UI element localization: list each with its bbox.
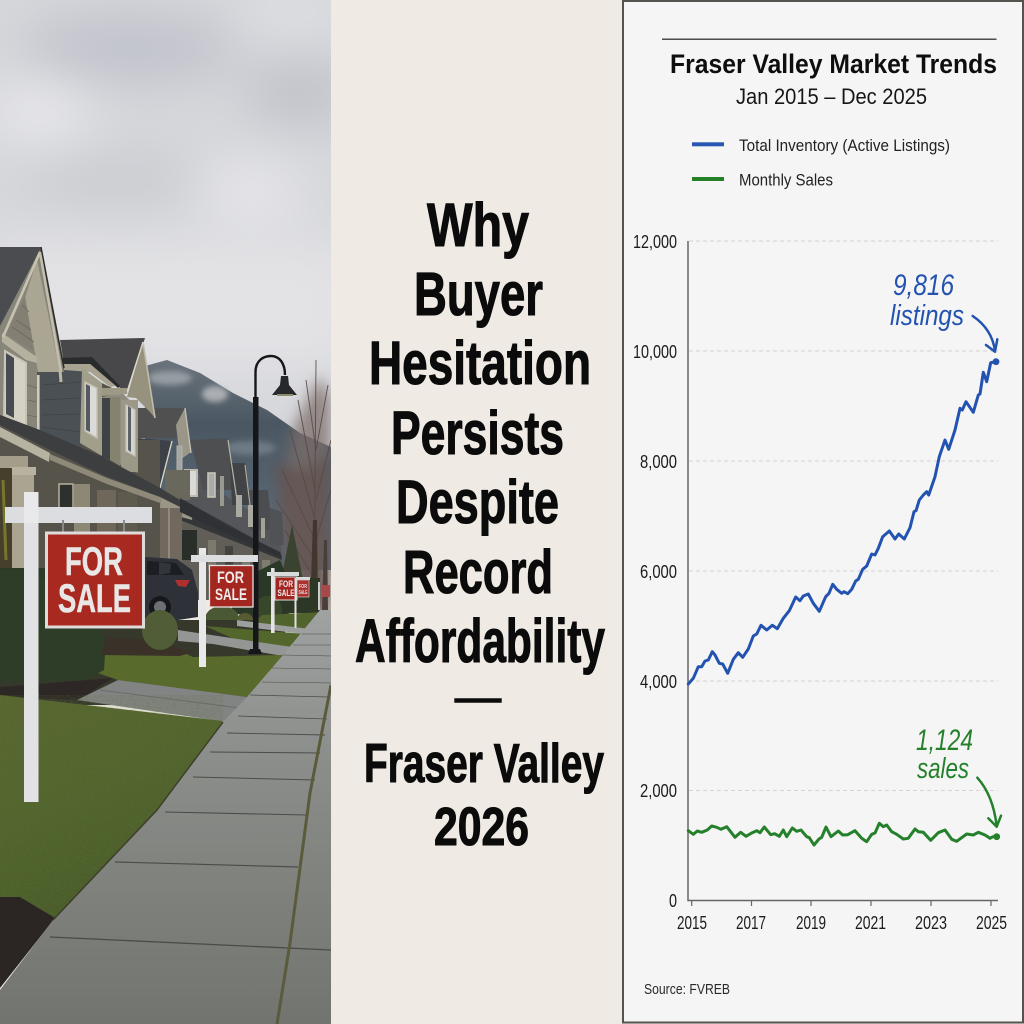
- photo: overcast sky: [0, 0, 331, 447]
- callout: sales: [916, 724, 1001, 827]
- callout: listings: listings: [890, 300, 964, 332]
- title: main headline: 2026: [434, 798, 529, 857]
- title: main headline: Why: [427, 191, 529, 260]
- x axis labels: 2017: [736, 913, 766, 933]
- title: dash separator: —: [455, 670, 501, 722]
- series: total inventory line: [688, 358, 999, 684]
- callout: listings: [890, 269, 997, 352]
- third house: [138, 408, 192, 562]
- sign: third and fourth distant for sale signs: SALE: [278, 588, 294, 598]
- photo: foreground shrubs: [0, 610, 186, 682]
- sign: second for sale sign: [191, 548, 258, 667]
- chart gridlines and axes: [688, 241, 998, 906]
- y axis labels: 4,000: [640, 672, 677, 692]
- sign: second for sale sign: SALE: [215, 585, 247, 604]
- y axis labels: 0: [669, 891, 677, 911]
- y axis labels: 8,000: [640, 452, 677, 472]
- photo: street lamp: [248, 356, 297, 654]
- y axis labels: [633, 232, 677, 911]
- panel: chart card: [623, 1, 1023, 1022]
- photo: main lawn: [0, 695, 223, 920]
- porch roof: [0, 415, 282, 558]
- chart heading: [662, 39, 997, 109]
- title: main headline: Buyer: [414, 260, 543, 329]
- sign: third and fourth distant for sale signs: SALE: [298, 590, 308, 596]
- sign: third and fourth distant for sale signs: FOR: [279, 579, 293, 589]
- sign: third and fourth distant for sale signs: [267, 568, 330, 633]
- title: main headline: Fraser Valley: [364, 733, 604, 794]
- x axis labels: [677, 913, 1007, 933]
- title: main headline: [355, 191, 605, 857]
- x axis labels: 2025: [976, 913, 1007, 933]
- chart legend: Total Inventory (Active Listings): [739, 137, 950, 155]
- sign: main for sale sign: [5, 492, 152, 802]
- second house: [40, 338, 155, 473]
- sign: second for sale sign: FOR: [217, 568, 244, 587]
- photo: parked SUV: [145, 557, 198, 620]
- title: main headline: Persists: [391, 399, 564, 468]
- first gable: [0, 247, 64, 432]
- chart heading: Jan 2015 – Dec 2025: [736, 84, 927, 109]
- callout: sales: 1,124: [916, 724, 973, 757]
- photo: mulch bed: [0, 897, 55, 988]
- source note: Source: FVREB: [644, 982, 730, 998]
- x axis labels: 2023: [915, 913, 947, 933]
- y axis labels: 2,000: [640, 781, 677, 801]
- callout: sales: sales: [917, 753, 969, 785]
- x axis labels: 2015: [677, 913, 707, 933]
- photo: background ground fill: [0, 620, 285, 705]
- chart legend: Monthly Sales: [739, 172, 833, 190]
- y axis labels: 12,000: [633, 232, 677, 252]
- chart legend: [692, 137, 950, 190]
- first two houses base: [0, 247, 130, 440]
- sign: main for sale sign: SALE: [58, 577, 131, 621]
- sign: third and fourth distant for sale signs: FOR: [299, 584, 307, 590]
- line chart: [633, 232, 1007, 933]
- title: main headline: Despite: [396, 468, 559, 537]
- y axis labels: 6,000: [640, 562, 677, 582]
- title: main headline: Affordability: [355, 607, 605, 676]
- sign: main for sale sign: FOR: [65, 540, 123, 584]
- distant houses: [180, 438, 285, 600]
- callout: listings: 9,816: [893, 269, 954, 302]
- title: main headline: Record: [403, 538, 553, 607]
- chart heading: Fraser Valley Market Trends: [670, 49, 997, 79]
- x axis labels: 2021: [855, 913, 886, 933]
- photo: bare tree: [274, 360, 331, 640]
- photo: distant evergreen: [284, 526, 302, 577]
- photo: farther lawns and walkways: [0, 612, 325, 722]
- panel: title background: [331, 0, 623, 1024]
- panel: street photo: [0, 0, 360, 1024]
- photo: row of houses: [0, 247, 285, 600]
- y axis labels: 10,000: [633, 342, 677, 362]
- x axis labels: 2019: [796, 913, 826, 933]
- photo: misty mountain: [145, 360, 331, 570]
- photo: hedges behind the lawn: [0, 560, 320, 620]
- first house lower porch: [0, 440, 160, 579]
- series: monthly sales line: [688, 823, 1000, 845]
- photo: concrete sidewalk: [0, 610, 331, 1024]
- title: main headline: Hesitation: [369, 329, 591, 398]
